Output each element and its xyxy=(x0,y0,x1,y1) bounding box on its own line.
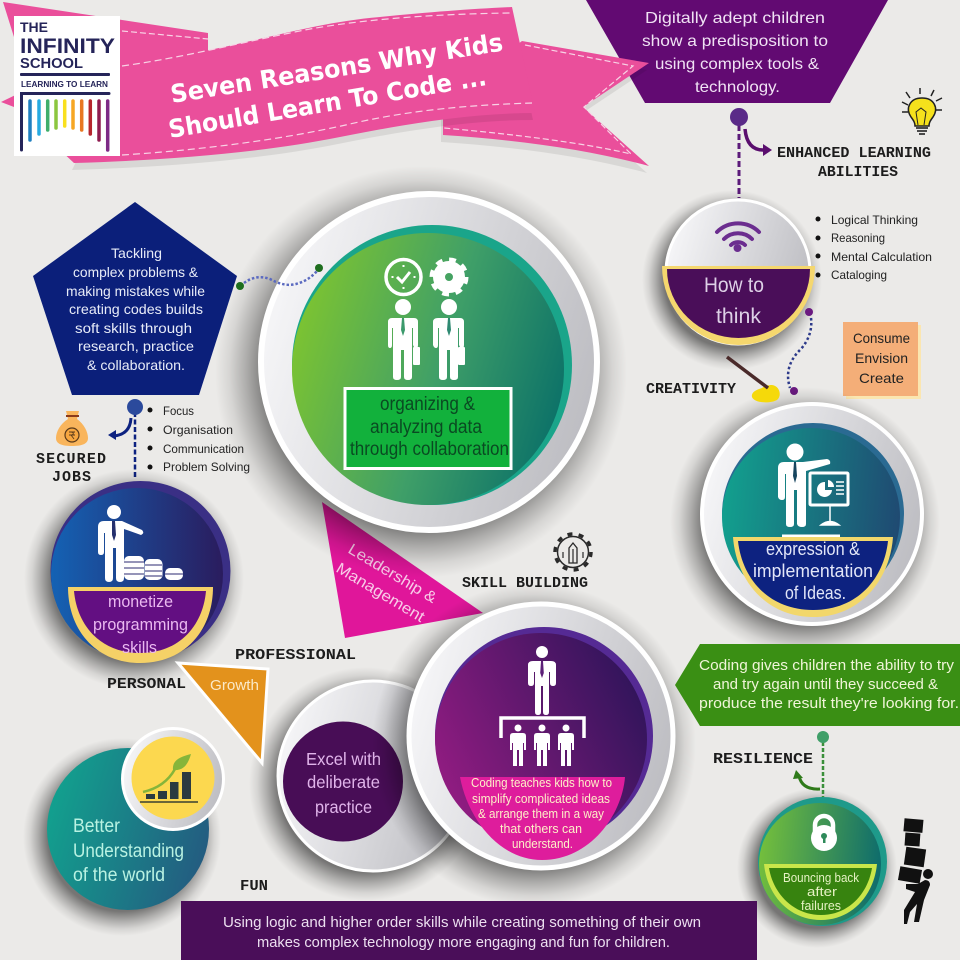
panel: how to think circle xyxy=(642,190,822,370)
panel: fun statement: makes complex technology more engaging and fun for children. xyxy=(257,935,670,951)
icon: wifi xyxy=(717,223,759,251)
list: soft skills: Communication xyxy=(163,442,244,456)
panel: creativity circle xyxy=(670,387,940,657)
icon: person with coins xyxy=(98,505,183,582)
panel: excel with deliberate practice: Excel with xyxy=(306,749,381,769)
icon: person carrying boxes xyxy=(898,818,933,924)
bowl: coding teaches kids: & arrange them in a way xyxy=(478,807,605,821)
bowl: bouncing back: failures xyxy=(801,898,841,913)
logo: INFINITY xyxy=(20,35,115,58)
icon: light bulb xyxy=(902,88,942,134)
bowl: creativity xyxy=(733,537,893,617)
heading: secured jobs xyxy=(36,451,106,486)
panel: leadership triangle: Management xyxy=(333,560,428,626)
panel: better understanding circle: Understanding xyxy=(73,841,184,862)
icon: gear xyxy=(432,260,466,294)
bowl: bouncing back: after xyxy=(807,884,838,899)
connector: dotted pentagon to central circle xyxy=(236,264,323,290)
heading: secured jobs: SECURED xyxy=(36,451,106,468)
panel: central collaboration circle xyxy=(215,166,627,578)
panel: collaboration statement: & collaboration. xyxy=(87,357,185,373)
bowl: bouncing back xyxy=(764,864,877,920)
panel: top statement xyxy=(586,0,888,103)
list: thinking skills: Logical Thinking xyxy=(831,213,918,227)
heading: fun: FUN xyxy=(240,878,268,895)
icon: gear with pencil xyxy=(555,534,591,570)
list: thinking skills: Cataloging xyxy=(831,268,887,282)
panel: resilience statement: produce the result they're looking for. xyxy=(699,695,959,712)
panel: consume envision create: Create xyxy=(859,370,904,386)
panel: consume envision create: Consume xyxy=(853,330,910,346)
panel: collaboration statement: soft skills through xyxy=(75,320,192,336)
icon: padlock xyxy=(811,816,837,851)
panel: excel with deliberate practice: practice xyxy=(315,797,372,817)
panel: creativity circle: implementation xyxy=(753,561,873,581)
bowl: coding teaches kids xyxy=(460,776,625,860)
heading: resilience: RESILIENCE xyxy=(713,751,813,768)
heading: enhanced learning abilities: ABILITIES xyxy=(818,164,898,181)
panel: top statement: technology. xyxy=(695,79,780,96)
bowl: bouncing back: Bouncing back xyxy=(783,870,859,885)
label box: organizing data xyxy=(345,388,511,468)
logo xyxy=(14,16,120,156)
list: soft skills xyxy=(148,404,250,474)
panel: collaboration statement: complex problems & xyxy=(73,264,199,280)
panel: leadership triangle: Leadership & xyxy=(345,541,440,607)
logo: THE xyxy=(20,20,48,35)
title ribbon xyxy=(1,2,649,173)
panel: growth triangle: Growth xyxy=(210,677,259,694)
heading: enhanced learning abilities: ENHANCED LEARNING xyxy=(777,145,931,162)
list: soft skills: Organisation xyxy=(163,423,233,437)
panel: top statement: using complex tools & xyxy=(655,56,819,73)
panel: how to think circle: How to xyxy=(704,274,764,297)
panel: secured jobs circle xyxy=(24,469,244,689)
arrow: secured jobs xyxy=(108,418,131,440)
panel: better understanding circle xyxy=(23,728,224,936)
panel: resilience statement: Coding gives children the ability to try xyxy=(699,657,955,674)
bowl: coding teaches kids: Coding teaches kids how to xyxy=(471,776,612,790)
connector: top statement to how to think xyxy=(730,108,748,198)
panel: collaboration statement xyxy=(33,202,237,395)
panel: growth triangle xyxy=(178,663,268,763)
hidden text fragment above bowl xyxy=(782,534,840,538)
label box: organizing data: through collaboration xyxy=(350,439,509,460)
list: soft skills: Problem Solving xyxy=(163,460,250,474)
icon: presenter xyxy=(778,444,848,527)
panel: resilience statement xyxy=(675,644,960,726)
connector: resilience statement to circle xyxy=(817,731,829,797)
panel: consume envision create xyxy=(843,322,921,399)
panel: excel with deliberate practice: deliberate xyxy=(307,772,380,792)
bowl: coding teaches kids: that others can xyxy=(500,822,582,836)
panel: better understanding circle: Better xyxy=(73,816,121,837)
panel: collaboration statement: creating codes builds xyxy=(69,301,203,317)
logo: LEARNING TO LEARN xyxy=(21,80,108,89)
panel: secured jobs circle: programming xyxy=(93,615,188,634)
heading: secured jobs: JOBS xyxy=(52,469,91,486)
title text: Seven Reasons Why Kids xyxy=(168,28,505,109)
panel: better understanding circle: of the world xyxy=(73,865,165,886)
panel: resilience circle xyxy=(737,788,897,948)
title text: Should Learn To Code ... xyxy=(166,62,489,144)
list: thinking skills: Reasoning xyxy=(831,231,885,245)
list: thinking skills: Mental Calculation xyxy=(831,250,932,264)
panel: creativity circle: of Ideas. xyxy=(785,583,846,603)
connector: pentagon to secured jobs xyxy=(127,399,143,479)
heading: enhanced learning abilities xyxy=(777,145,931,181)
panel: collaboration statement: research, practice xyxy=(78,338,194,354)
panel: fun statement: Using logic and higher order skills while creating something of their own xyxy=(223,915,701,931)
logo: SCHOOL xyxy=(20,56,83,72)
panel: collaboration statement: making mistakes while xyxy=(66,283,205,299)
panel: how to think circle: think xyxy=(716,305,762,328)
icon: growth chart xyxy=(122,728,224,830)
bowl: monetize programming skills xyxy=(68,587,213,663)
label box: organizing data: analyzing data xyxy=(370,417,482,438)
panel: collaboration statement: Tackling xyxy=(111,245,162,261)
heading: professional: PROFESSIONAL xyxy=(235,647,356,664)
bowl: coding teaches kids: understand. xyxy=(512,837,573,851)
connector: dotted how to think to creativity xyxy=(788,308,813,395)
heading: personal: PERSONAL xyxy=(107,676,186,693)
icon: team hierarchy xyxy=(501,646,584,766)
label box: organizing data: organizing & xyxy=(380,394,475,415)
arrow: enhanced learning xyxy=(745,129,772,156)
panel: secured jobs circle: skills xyxy=(122,638,157,657)
panel: consume envision create: Envision xyxy=(855,350,908,366)
panel: creativity circle: expression & xyxy=(766,539,860,559)
panel: resilience statement: and try again until they succeed & xyxy=(713,676,938,693)
icon: two business people xyxy=(388,299,465,380)
panel: fun statement xyxy=(181,901,757,960)
heading: skill building: SKILL BUILDING xyxy=(462,575,588,592)
arrow: resilience xyxy=(793,770,820,789)
icon: clock xyxy=(386,260,421,294)
list: soft skills: Focus xyxy=(163,404,194,418)
panel: leadership triangle xyxy=(322,502,483,638)
panel: top statement: show a predisposition to xyxy=(642,33,828,50)
icon: money bag xyxy=(56,411,88,446)
panel: excel with deliberate practice xyxy=(249,667,483,901)
heading: creativity: CREATIVITY xyxy=(646,381,736,398)
bowl: coding teaches kids: simplify complicated ideas xyxy=(472,792,610,806)
panel: skill building circle xyxy=(372,583,696,907)
list: thinking skills xyxy=(816,213,932,282)
panel: secured jobs circle: monetize xyxy=(108,592,173,611)
bowl: how to think xyxy=(662,266,815,345)
panel: top statement: Digitally adept children xyxy=(645,10,825,27)
icon: paint brush xyxy=(727,357,780,402)
